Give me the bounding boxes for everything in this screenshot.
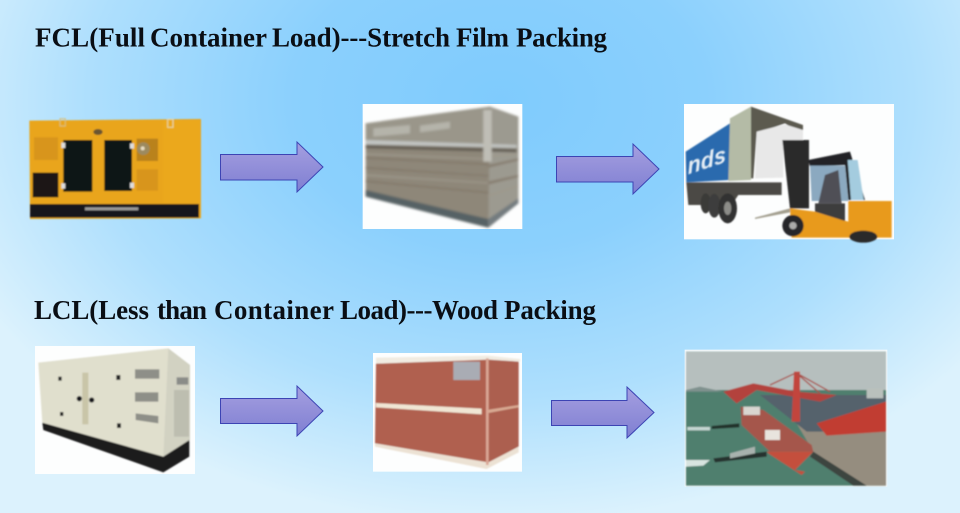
heading: FCL: Film bbox=[456, 22, 510, 52]
heading: LCL: Container bbox=[214, 295, 334, 325]
heading: LCL: than bbox=[157, 295, 207, 325]
image: stretch film pack bbox=[363, 104, 522, 229]
image: wooden case bbox=[373, 353, 522, 472]
heading: FCL: Container bbox=[150, 22, 267, 52]
heading: LCL bbox=[34, 295, 596, 325]
arrow 3 bbox=[220, 386, 323, 436]
image: white generator bbox=[35, 346, 195, 474]
arrow 4 bbox=[552, 387, 654, 438]
heading: FCL bbox=[35, 22, 608, 52]
heading: LCL: Load)---Wood bbox=[340, 295, 498, 325]
heading: LCL: LCL(Less bbox=[34, 295, 149, 325]
arrow 2 bbox=[556, 144, 659, 194]
image: truck and forklift bbox=[684, 104, 894, 243]
heading: LCL: Packing bbox=[504, 295, 596, 325]
image: yellow generator bbox=[29, 119, 201, 219]
heading: FCL: Load)---Stretch bbox=[272, 22, 450, 52]
heading: FCL: Packing bbox=[516, 22, 608, 52]
container lettering: nds bbox=[687, 141, 727, 180]
image: container port bbox=[685, 350, 887, 487]
heading: FCL: FCL(Full bbox=[35, 22, 145, 52]
arrow 1 bbox=[220, 142, 323, 192]
